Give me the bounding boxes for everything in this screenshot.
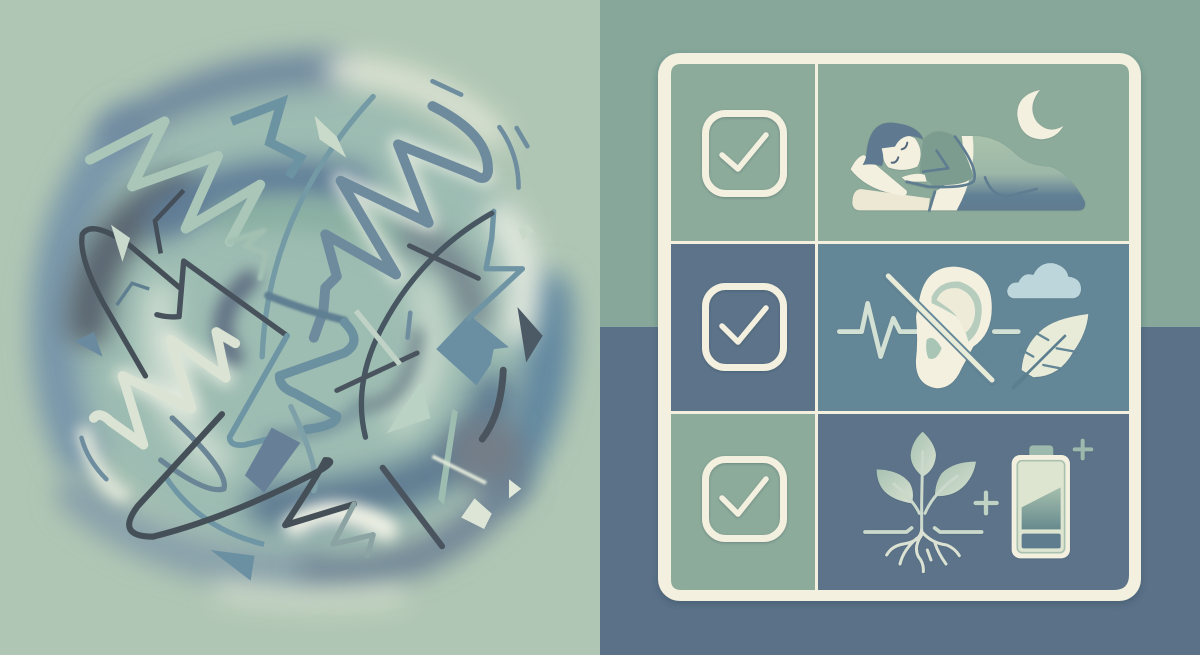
- right dash: [994, 325, 1018, 339]
- body: [920, 132, 973, 185]
- cloud: [1007, 263, 1081, 298]
- icon: noise muted ear, cloud and feather: [839, 263, 1088, 388]
- fading zigzag bottom: [333, 504, 373, 556]
- shard: pale right centre: [387, 382, 431, 433]
- zigzag: teal shard top: [232, 102, 300, 177]
- hair: [863, 123, 923, 166]
- curved thin line through centre: [262, 97, 373, 357]
- battery level: [1022, 487, 1061, 529]
- cell: row 2 illustration: [818, 244, 1129, 411]
- shard: cream 1: [461, 498, 492, 529]
- shard: small pale: [519, 225, 534, 240]
- panel: chaos background: [0, 0, 600, 655]
- face: [882, 136, 921, 170]
- moon: [1017, 90, 1063, 139]
- cell: row 2 checkbox: [671, 244, 815, 411]
- feather notches: [1022, 333, 1075, 368]
- zigzag: cream lower-left: [94, 332, 235, 445]
- ground lines: [865, 528, 982, 532]
- triangles and shards: [75, 116, 543, 581]
- roots: [887, 530, 959, 572]
- ear inner: [932, 281, 982, 342]
- dark large loop bottom: [129, 414, 354, 537]
- battery cap: [1029, 445, 1053, 455]
- cell: row 1 checkbox: [671, 64, 815, 241]
- dark arc right: [361, 213, 492, 437]
- faded blue S curve: [268, 296, 344, 320]
- shard: pale triangle: [111, 225, 130, 262]
- zigzag tail: faded: [230, 230, 266, 278]
- blanket: [957, 136, 1085, 210]
- blanket fold line: [985, 177, 1037, 196]
- teal zigzag right: [469, 211, 522, 319]
- icon: sleeping person and moon: [851, 90, 1085, 210]
- battery body: [1012, 455, 1070, 558]
- illustration: swirling tangled scribbles: [54, 70, 549, 599]
- ear outer: [916, 267, 992, 388]
- hand: [902, 174, 927, 182]
- blurred swirl rings: [54, 70, 549, 599]
- pulse line: [839, 303, 918, 357]
- teal polyline continuing down: [230, 336, 287, 445]
- soft glow behind scribbles: [122, 144, 486, 408]
- lower pillow: [852, 189, 930, 210]
- upper pillow: [851, 155, 907, 195]
- cell: row 3 illustration: [818, 414, 1129, 590]
- battery reserve cell: [1022, 534, 1061, 548]
- dark cross strokes: [337, 246, 503, 546]
- battery inner: [1017, 461, 1065, 553]
- shard: large blue square: [436, 315, 509, 385]
- stems: [894, 452, 957, 533]
- mute slash: [888, 276, 992, 380]
- shard: slate block: [245, 428, 300, 493]
- cell: row 3 checkbox: [671, 414, 815, 590]
- icon: checkbox row 1: [706, 114, 784, 194]
- plus left: [976, 493, 997, 513]
- sheet band: [929, 136, 973, 210]
- outline arm and blanket edge: [907, 137, 975, 210]
- icon: sprout with roots and charging battery: [865, 432, 1091, 572]
- leaf top: [911, 432, 936, 477]
- pale diagonal stroke: [356, 311, 400, 364]
- S curve zigzag centre: [279, 322, 354, 429]
- cell: row 1 illustration: [818, 64, 1129, 241]
- leaf right: [935, 462, 976, 496]
- feather: [1022, 314, 1088, 377]
- mute slash shadow: [888, 276, 992, 380]
- dark polyline centre: [157, 261, 287, 336]
- panel: right background lower blue: [600, 327, 1200, 655]
- short dashes around rim: [82, 81, 527, 479]
- icon: checkbox row 2: [706, 286, 784, 368]
- shard: pale top: [315, 116, 346, 158]
- blue loop lower-left: [161, 418, 224, 490]
- zigzag: pale green top-left: [90, 121, 260, 242]
- dark loop left: [82, 229, 180, 376]
- teal ring segment bottom: [165, 475, 264, 544]
- small blue chevron: [117, 283, 149, 305]
- feather spine: [1013, 336, 1065, 387]
- eyes: [892, 143, 907, 163]
- teal line lower centre: [291, 407, 315, 491]
- leaf left: [877, 469, 913, 503]
- icon: checkbox row 3: [706, 460, 784, 538]
- shard: cream 2: [509, 479, 521, 498]
- shard: left blue triangle: [75, 332, 103, 357]
- checklist table: [658, 53, 1141, 601]
- table frame shadow and fill: [658, 53, 1141, 601]
- zigzag: blue top-right: [314, 106, 488, 338]
- ear canal: [926, 338, 942, 359]
- cream streak lower right: [432, 456, 486, 483]
- shard: bottom teal: [210, 550, 254, 581]
- shard: dark triangle: [517, 307, 543, 363]
- panel: right background upper green: [600, 0, 1200, 327]
- small dark zigzag: [155, 190, 184, 253]
- plus right: [1075, 441, 1091, 458]
- shard: long sliver: [438, 408, 458, 505]
- ear inner highlight: [937, 288, 975, 333]
